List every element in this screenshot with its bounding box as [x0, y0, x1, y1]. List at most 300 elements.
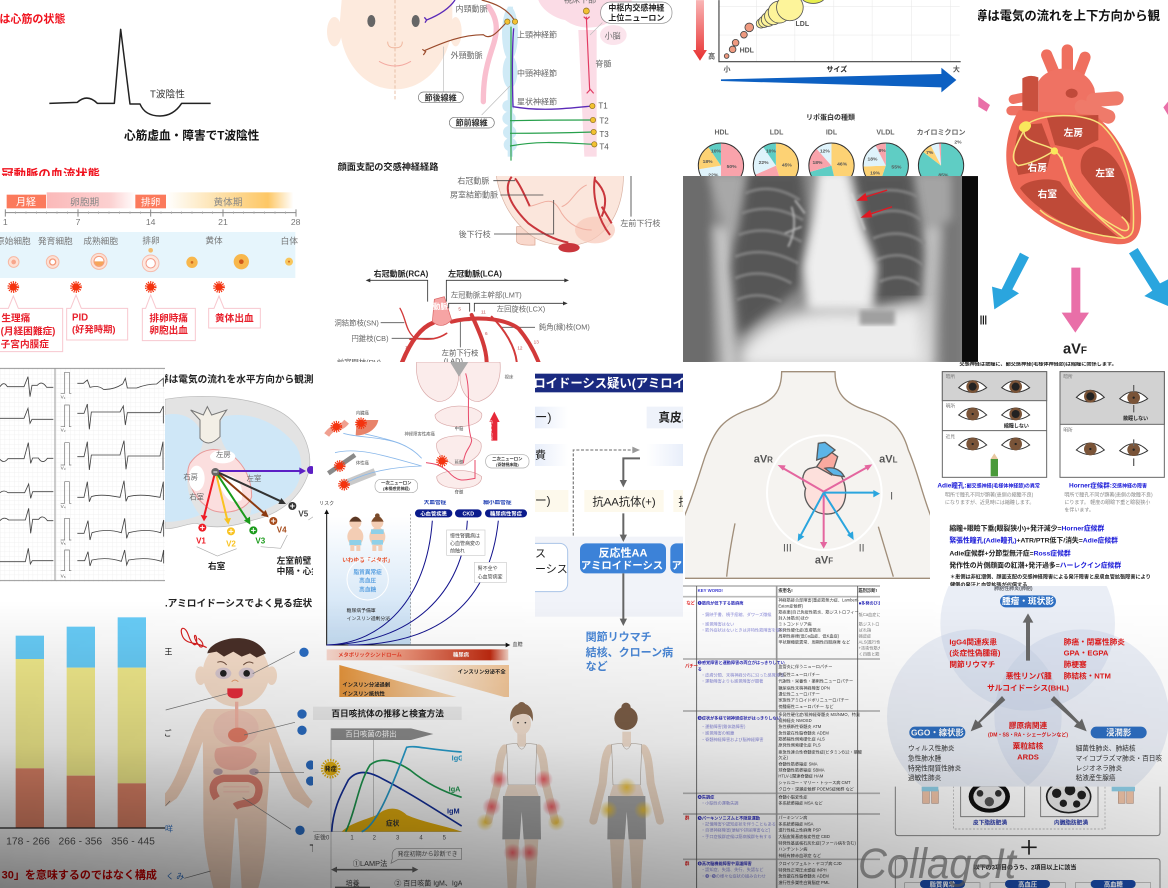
pie percentages: 19%: [870, 171, 881, 177]
pill: infiltration: [1091, 727, 1147, 738]
electrodes: v1 to v6: [198, 466, 315, 535]
circle: lead wheel: [767, 435, 882, 550]
red fragments left: 群: [685, 860, 690, 867]
disease names: 特発性基底核石灰化症(ファール病を含む): [778, 839, 857, 845]
timeline axis with day numbers: 7: [76, 217, 81, 227]
key words: ・感覚障害の解離: [701, 729, 734, 735]
brackets and territory labels: [197, 517, 329, 576]
table headers: 疾患名!: [778, 587, 793, 594]
text: collagen group: [988, 720, 1068, 762]
labels: roman numerals: Ⅰ: [887, 492, 897, 503]
text fragments: ご: [164, 728, 172, 738]
chart: risk curves: [327, 521, 498, 645]
labels: test methods: ② 百日咳菌 IgM、IgA: [394, 878, 463, 887]
illustration: coronary artery tree: [400, 308, 539, 363]
arrowheads: [201, 467, 306, 525]
pie percentages: 55%: [891, 165, 902, 171]
labels: anatomy: [451, 0, 621, 152]
text: syndrome formulas: 発作性の片側顔面の紅潮+発汗過多=ハーレクイン症候群: [949, 561, 1121, 570]
pill label: postganglionic fibres: 節後線維: [425, 92, 457, 102]
timeline: cycle phase bar: 黄体期: [214, 196, 242, 208]
text: collagen group: ARDS: [1017, 753, 1039, 762]
key words: ・皮膚分類、末梢神経分布に沿った感覚障害: [701, 672, 784, 678]
text: lung cancer group: 肺癌・閉塞性肺炎: [1064, 636, 1125, 646]
x-ray: lungs: [732, 170, 923, 337]
table: thick column line: [774, 586, 779, 888]
key words: ・運動障害(錐体路障害): [701, 723, 746, 729]
ct frames: [961, 783, 1098, 817]
text: adie description: Adie瞳孔:副交感神経(毛様体神経節)の異常: [937, 481, 1040, 490]
icon: onset burst: [322, 760, 339, 777]
illustration: midbrain: [435, 406, 482, 427]
panel: chest x-ray: [683, 176, 978, 362]
arrows: red pointers: [858, 190, 892, 217]
illustration: face: [327, 0, 462, 100]
labels: rca and lca brackets: 洞結節枝(SN): [334, 319, 379, 328]
illustration: great vessels: [1011, 50, 1117, 123]
row: skin biopsy: ー): [535, 410, 551, 424]
arrow: pain conduction up: [488, 412, 500, 441]
text: infiltration list: マイコプラズマ肺炎・百日咳: [1076, 753, 1162, 762]
disease names: 血管炎に伴うニューロパチー: [778, 663, 832, 669]
differential: [859, 600, 895, 656]
pie labels: HDL: [714, 130, 730, 137]
dashed frame: [954, 777, 1105, 829]
heading: coronary blood flow, clipped: 冠動脈の血流状態: [1, 167, 100, 182]
disease names: 多発性硬化症/視神経脊髄炎 MS/NMO、特発: [778, 711, 861, 717]
labels: roman numerals: [782, 492, 897, 554]
disease names: 多系統萎縮症 MSA: [778, 820, 814, 826]
bar: 356-445: [118, 617, 146, 828]
labels: rca and lca brackets: (LAD): [444, 356, 463, 365]
disease names: 多系統萎縮症 MSA など: [778, 800, 824, 806]
small branch numbers: 5: [458, 307, 461, 312]
pie: chylomicron: [918, 143, 964, 188]
red fragments left: パチー: [685, 662, 698, 669]
small caption above: 肺胞性肺炎(肺胞): [994, 585, 1033, 592]
chart: igg curve: [362, 747, 462, 832]
arrow: up: [1023, 613, 1033, 661]
axis numbers: 4: [419, 836, 423, 842]
ecg traces: limb leads: [0, 377, 53, 564]
text fragments: 咩: [165, 823, 173, 833]
nerve fibres: green preganglionic: [510, 27, 594, 161]
pie percentages: 50%: [727, 164, 737, 170]
pie percentages: 18%: [703, 159, 713, 165]
pie percentages: 22%: [708, 173, 719, 179]
disease names: 神経有棘赤血球症 など: [778, 852, 822, 858]
text: syndrome formulas: Adie症候群+分節型無汗症=Ross症候群: [949, 548, 1071, 557]
arrows: pink side: [978, 97, 1168, 115]
metabo conditions: 高血糖: [359, 586, 376, 594]
text: horner description: 明所で瞳孔不同が顕著(患側の散瞳不良): [1064, 491, 1153, 498]
pie percentages: 46%: [837, 162, 848, 168]
text: collagen group: 膠原病関連: [1009, 720, 1047, 730]
illustration: thorax: [165, 396, 310, 529]
arrow: lamp method: [331, 859, 418, 873]
key words: ・認知症、失語、失行、失認など: [701, 866, 764, 872]
disease names: 傍腫瘍性ニューロパチー など: [778, 703, 834, 709]
key words: ❶筋肉が低下する筋麻痺: [698, 599, 744, 605]
disease names: 急性散在性脳脊髄炎 ADEM: [778, 873, 829, 879]
labels: fat types: 皮下脂肪肥満: [973, 818, 1007, 826]
axis numbers: [314, 834, 447, 842]
disease names: ミトコンドリア病: [778, 620, 812, 626]
arrow: avf pink: [1062, 268, 1089, 333]
pill label: postganglionic fibres: [418, 23, 602, 115]
labels: leads: aVL: [879, 454, 898, 466]
illustration: heart section: [188, 449, 252, 512]
text: horner description: [1064, 481, 1153, 514]
chart labels: [708, 21, 960, 73]
x-ray: soft tissue and arms: [675, 167, 963, 373]
axis numbers: 症後0: [314, 834, 330, 842]
labels: test methods: 培養: [346, 878, 360, 887]
pill label: central sympathetic neuron: [601, 2, 672, 23]
text: syndrome formulas: 緊張性瞳孔(Adie瞳孔)+ATR/PTR低下/消失=Adie症候群: [949, 536, 1118, 545]
text: igg4 group: 関節リウマチ: [949, 659, 996, 669]
disease names: 代謝性・栄養性・薬剤性ニューロパチー: [778, 678, 853, 684]
text fragments: く み: [166, 872, 184, 881]
disease names: 大脳皮質基底核変性症 CBD: [778, 833, 830, 839]
axis numbers: 2: [373, 836, 377, 842]
disease names: 周期性麻痺(低Ca血症、低K血症): [778, 632, 840, 638]
labels: vessel disease: 大血管症: [424, 498, 447, 506]
labels: fat types: [973, 818, 1088, 826]
triangle: insulin excess: インスリン抵抗性: [342, 690, 386, 698]
note boxes: 心血管病変: [478, 573, 503, 580]
panel: lung imaging venn: [887, 585, 1168, 888]
row: anti aa antibody: 抗AA抗体(+): [592, 494, 656, 508]
differential: 筋ジストロフィー: [859, 620, 892, 626]
arrows: pink augmented leads: [782, 467, 868, 543]
text fragments: 下: [309, 844, 317, 853]
illustration: heart: [803, 442, 846, 514]
text: centre: [987, 671, 1069, 692]
chart labels: 高: [708, 51, 715, 60]
frame: horner syndrome: 散瞳しない: [1123, 415, 1148, 422]
table headers: [698, 587, 878, 594]
chart labels: LDL: [796, 21, 810, 28]
box: white amyloidosis fragment: ーシス: [535, 564, 568, 576]
leader lines and labels: coronary parts: 左前下行枝: [620, 218, 660, 228]
labels: heart chambers: [183, 450, 261, 501]
pie percentages: 22%: [759, 160, 769, 166]
pills: complications: 糖尿病性腎症: [490, 509, 523, 517]
red fragments left: など: [686, 600, 696, 606]
leader lines and labels: coronary parts: 房室結節動脈: [450, 190, 498, 200]
icons: pain bursts: [9, 282, 224, 292]
callout: dysmenorrhea: 生理痛: [1, 313, 31, 325]
band: follicle stages: [0, 232, 298, 278]
pie percentages: 85%: [938, 173, 949, 179]
labels: v1 to v5: V1: [196, 536, 206, 545]
chart: ecg inverted t wave trace: [49, 29, 211, 116]
caption: t wave inversion: 心筋虚血・障害でT波陰性: [124, 128, 260, 142]
frame: adie pupil: 明所: [946, 403, 955, 410]
text: lung cancer group: [1064, 636, 1125, 680]
labels: heart chambers: 右室: [1038, 188, 1057, 200]
timeline: cycle phase bar: 排卵: [141, 196, 160, 208]
leader lines: [166, 652, 304, 878]
disease names: 進行性核上性麻痺 PSP: [778, 827, 821, 833]
pill label: preganglionic fibres: [449, 117, 494, 128]
labels: pain types: 神経障害性疼痛: [405, 430, 435, 437]
illustration: obese boy and girl: [347, 513, 385, 551]
text: collagen group: (DM・SS・RA・シェーグレンなど): [988, 731, 1068, 738]
timeline axis with day numbers: 1: [3, 217, 8, 227]
text: causes: [586, 630, 673, 673]
box: hypertension: [990, 879, 1065, 888]
venn: clipped circles: [887, 586, 1168, 786]
axis labels: 266 - 356: [59, 837, 102, 848]
key words: ・運動障害よりも感覚障害が顕著: [701, 678, 763, 684]
row: skin biopsy: 真皮.: [658, 410, 685, 424]
panel: 12 lead ecg strips: [0, 368, 165, 582]
icon: tongue: [227, 688, 243, 698]
key words: ・小脳性の運動失調: [701, 800, 738, 806]
disease names: 神経筋接合部障害(重症筋無力症、Lambert-: [778, 596, 859, 602]
text: infiltration list: 細菌性肺炎、肺結核: [1076, 743, 1136, 752]
pie: idl: [809, 143, 854, 188]
metabo conditions: [347, 559, 388, 600]
labels: anatomy: 上頸神経節: [517, 30, 557, 40]
labels: heart chambers: 右房: [183, 472, 198, 481]
axis labels: 356 - 445: [111, 837, 155, 848]
text: lung cancer group: GPA・EGPA: [1064, 649, 1109, 658]
disease names: クロウ・深瀬症候群 POEMS症候群 など: [778, 785, 855, 791]
text: infiltration list: 粘液産生腺癌: [1076, 773, 1116, 782]
labels: v1 to v5: [196, 510, 309, 549]
nerve fibres: purple postganglionic: [424, 0, 592, 109]
labels: heart chambers: 右室: [189, 492, 204, 501]
box: reactive aa amyloidosis: [580, 543, 666, 573]
key words: ・筋外症状はないときは非特性筋障害を疑う: [701, 626, 784, 632]
text: syndrome formulas: [949, 523, 1121, 570]
timeline axis with day numbers: 28: [291, 217, 301, 227]
leader lines and labels: coronary parts: 右冠動脈: [457, 176, 489, 186]
x-ray: diaphragm: [738, 303, 930, 370]
labels: pain types: [356, 373, 514, 495]
text: ggo list: 過敏性肺炎: [908, 773, 942, 782]
disease names: 球脊髄性筋萎縮症 SBMA: [778, 766, 825, 772]
key words: ・脊髄神経障害および脳神経障害: [701, 736, 763, 742]
labels: heart chambers: 左房: [216, 450, 231, 459]
disease names: 脊髄小脳変性症: [778, 794, 807, 800]
note boxes: 腎不全や: [478, 565, 498, 572]
labels: anatomy: 脊髄: [595, 58, 611, 68]
frame: horner syndrome: 暗所: [1063, 373, 1073, 380]
text: causes: など: [586, 659, 608, 673]
arrow: lead ii blue: [1129, 248, 1168, 306]
key words: [698, 599, 785, 878]
red note: 30」を意味するのではなく構成: [2, 868, 157, 882]
illustration: body: [165, 709, 313, 888]
labels: heart chambers: 左房: [1064, 127, 1083, 139]
illustration: head: [195, 638, 277, 707]
pie labels: IDL: [826, 130, 838, 137]
axis numbers: 3: [396, 836, 400, 842]
metabo conditions: 脂質異常症: [354, 568, 382, 576]
labels: anatomy: 中頸神経節: [517, 68, 557, 78]
axis numbers: 1: [350, 836, 354, 842]
metabolic criteria section: [894, 786, 1160, 888]
pill: first neuron: [375, 479, 418, 493]
triangle: insulin deficiency: インスリン分泌不全: [458, 668, 506, 676]
illustration: aorta root: 大動脈: [426, 302, 448, 311]
chart: early stage area: [327, 517, 411, 645]
text: adie description: になりますが、近見時には縮瞳します。: [945, 499, 1034, 506]
sensory curves: blue: [335, 433, 422, 482]
callout: ovulation pain: 排卵時痛: [149, 312, 188, 324]
disease names: 多発性硬化症/皮膚筋炎: [778, 626, 821, 632]
callout: pid: PID: [72, 312, 88, 323]
illustration: lungs: [165, 414, 301, 522]
glows: red joints: [482, 770, 561, 862]
table: column lines: [697, 586, 858, 888]
bar: bacteria detection arrow: [331, 728, 433, 740]
labels: rca and lca brackets: 右冠動脈(RCA): [374, 269, 429, 279]
disease names: クロイツフェルト・ヤコブ病 CJD: [778, 860, 842, 866]
box: reactive aa amyloidosis: アミロイドーシス: [581, 560, 663, 572]
differential: +技術性筋力: [859, 644, 882, 650]
disease names: 進行性多巣性白質脳症 PML: [778, 879, 830, 885]
panel: aVR aVL lead body diagram: [685, 371, 930, 579]
labels: heart chambers: 右房: [1028, 162, 1047, 174]
text: causes: 関節リウマチ: [586, 630, 652, 644]
callout: ovulation pain: [142, 295, 195, 341]
pie percentages: 10%: [766, 149, 776, 155]
triangle: insulin excess: インスリン分泌過剰: [342, 681, 390, 689]
chart baseline: [0, 826, 165, 830]
disease names: 封入体筋炎)ほか: [778, 614, 809, 620]
arrows: blue limb leads: [800, 493, 875, 537]
icon: onset burst: 発症: [325, 765, 337, 773]
row: anti aa antibody: 抗: [678, 495, 690, 508]
differential: ばれ指: [859, 626, 871, 632]
illustration: medulla: [437, 436, 481, 465]
pill: infiltration: 浸潤影: [1106, 727, 1132, 737]
key words: ❺パーキンソニズムと不随意運動: [698, 814, 760, 820]
labels: fat types: 内臓脂肪肥満: [1054, 818, 1088, 826]
arrows: precordial vectors: [204, 471, 302, 520]
arrowheads: blue: [798, 490, 880, 541]
panel: ecg t wave and menstrual cycle column: [0, 12, 301, 352]
key words: ・鏡映手書、橈手痙縮、ダワーズ徴候: [701, 611, 772, 617]
chart: guides: [313, 728, 462, 888]
arrowheads: pink: [778, 464, 872, 549]
labels: pain types: 脊髄: [455, 488, 464, 495]
callout: dysmenorrhea: 子宮内膜症: [1, 338, 49, 350]
labels: v1 to v5: V3: [255, 536, 266, 545]
glows: yellow joints: [476, 777, 653, 831]
bar: metabolic syndrome to diabetes: メタボリックシンドローム: [338, 651, 403, 659]
chart: hdl bubbles: [724, 23, 754, 58]
label: t wave: T波陰性: [150, 88, 185, 100]
labels: antibodies: [447, 754, 464, 815]
heading: pertussis: 百日咳抗体の推移と検査方法: [331, 708, 444, 719]
figure: woman back: [593, 703, 660, 888]
disease names: 免疫性ニューロパチー: [778, 671, 820, 677]
panel: joint pain figures: [477, 697, 664, 888]
timeline: cycle phase bar: [7, 192, 293, 208]
text: centre: 悪性リンパ腫: [1006, 671, 1052, 681]
pie percentages: 2%: [954, 139, 962, 145]
differential: 強皮症: [859, 632, 871, 638]
box: white amyloidosis fragment: ス: [535, 548, 546, 560]
text: infiltration list: [1076, 743, 1162, 782]
frame: horner syndrome: [1060, 372, 1164, 477]
box: next type fragment: [670, 543, 690, 573]
labels: rca and lca brackets: 円錐枝(CB): [351, 334, 389, 343]
text fragments: 王: [164, 648, 172, 657]
disease names: 筋萎縮性側索硬化症 ALS: [778, 736, 825, 742]
pie: ldl: [753, 143, 799, 188]
organs: thorax: [213, 710, 259, 747]
frame: adie pupil: 暗所: [946, 373, 955, 380]
ecg lead labels: V₂: [61, 427, 66, 432]
frame: adie pupil: 縮瞳しない: [1004, 422, 1029, 429]
ecg calibration pulses: [61, 372, 71, 571]
nodes: ganglia and thoracic roots: [505, 8, 597, 147]
labels: anatomy: T1: [598, 101, 608, 110]
panel: pertussis antibody chart: [313, 697, 464, 888]
note boxes: 前触れ: [450, 547, 465, 554]
disease names: 急性散在性脳脊髄炎 ADEM: [778, 729, 829, 735]
illustration: heart outer wall: [1006, 110, 1141, 244]
key words: ❻高次脳機能障害や意識障害: [698, 860, 752, 866]
labels: anatomy: T2: [599, 116, 609, 125]
text: ggo list: ウィルス性肺炎: [908, 743, 955, 752]
pill: second neuron: 二次ニューロン: [492, 456, 523, 463]
labels: rca and lca brackets: 左冠動脈主幹部(LMT): [451, 290, 522, 299]
panel: neuropathy table: [683, 585, 895, 888]
disease names: シャルコー・マリー・トゥース病 CMT: [778, 779, 851, 785]
band: follicle stages: 黄体: [205, 234, 223, 245]
panel: precordial leads cross section: [159, 374, 329, 576]
heading: symptoms: .アミロイドーシスでよく見る症状: [165, 598, 312, 610]
panel: metabolic risk chart: [319, 498, 527, 698]
pie percentages: 10%: [711, 148, 722, 154]
disease names: ハンチントン病: [778, 846, 807, 852]
labels: roman numerals: Ⅲ: [782, 543, 792, 554]
text: centre: サルコイドーシス(BHL): [987, 683, 1069, 692]
heading: limb leads: 導は電気の流れを上下方向から観: [975, 8, 1161, 23]
x-ray: ribs: [735, 189, 925, 302]
arrow: pain conduction up: 痛みの伝導: [488, 420, 494, 440]
disease names: 脊髄性筋萎縮症 SMA: [778, 760, 818, 766]
band: follicle stages: 排卵: [142, 234, 160, 245]
pill: mass: 腫瘤・斑状影: [1002, 595, 1054, 606]
panel: pupil disorders: [930, 359, 1165, 589]
labels: pain types: 体性痛: [356, 460, 369, 467]
disease names: Eaton症候群): [778, 602, 804, 608]
labels: v1 to v5: V2: [226, 540, 236, 549]
frame: adie pupil: [942, 372, 1047, 477]
illustration: sympathetic ganglion chain: [502, 7, 518, 157]
labels: heart chambers: [1028, 127, 1115, 200]
key words: ・自律神経障害(便秘や排尿障害など): [701, 827, 771, 833]
heading: myocardial state: は心筋の状態: [0, 12, 65, 26]
ecg lead labels: V₆: [61, 573, 66, 578]
labels: pain types: 延髄: [455, 458, 464, 465]
callout: dysmenorrhea: [0, 296, 63, 352]
pie: vldl: [863, 143, 908, 188]
chart labels: 大: [953, 64, 960, 73]
text: prediabetes: [347, 607, 390, 622]
labels: roman numerals: Ⅱ: [857, 543, 867, 554]
illustration: carotid artery: [483, 7, 496, 102]
